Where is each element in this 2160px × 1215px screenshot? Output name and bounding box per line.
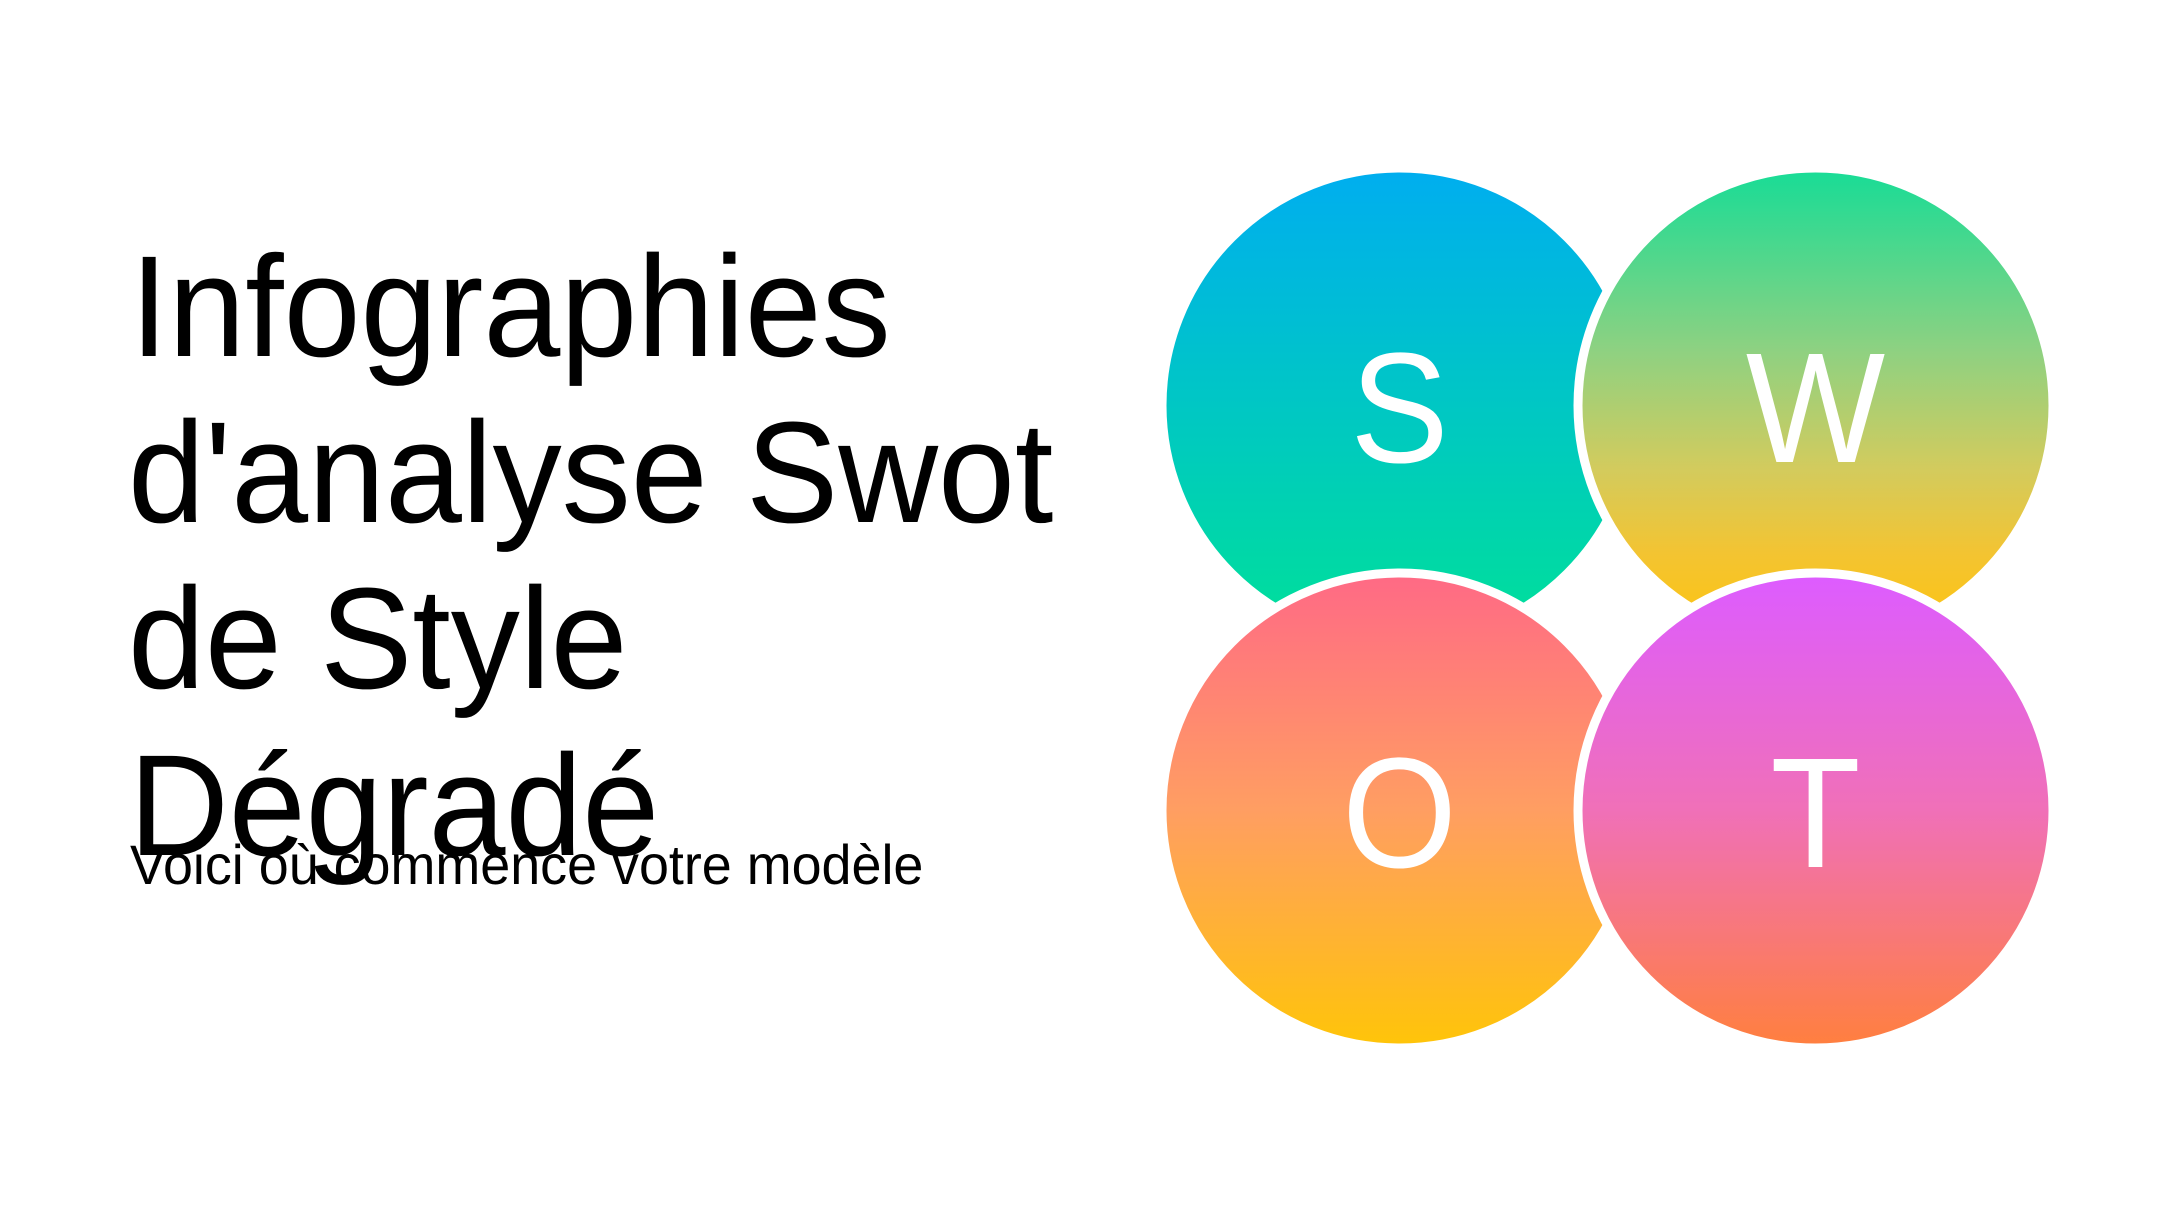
SWOT circle: S (1162, 168, 1637, 643)
SWOT circle: S: S (1350, 321, 1449, 496)
title (128, 225, 1053, 886)
SWOT circle: O: O (1342, 726, 1457, 901)
SWOT circle: T (1578, 573, 2053, 1048)
title: d'analyse Swot (128, 391, 1053, 553)
SWOT circle: T: T (1770, 726, 1861, 901)
SWOT circle: O (1162, 573, 1637, 1048)
SWOT circle: W: W (1746, 321, 1885, 496)
title: Infographies (130, 225, 891, 387)
title: de Style (128, 557, 627, 719)
title: Dégradé (129, 724, 659, 886)
subtitle: Voici où commence votre modèle (130, 833, 923, 896)
SWOT circle: W (1578, 168, 2053, 643)
